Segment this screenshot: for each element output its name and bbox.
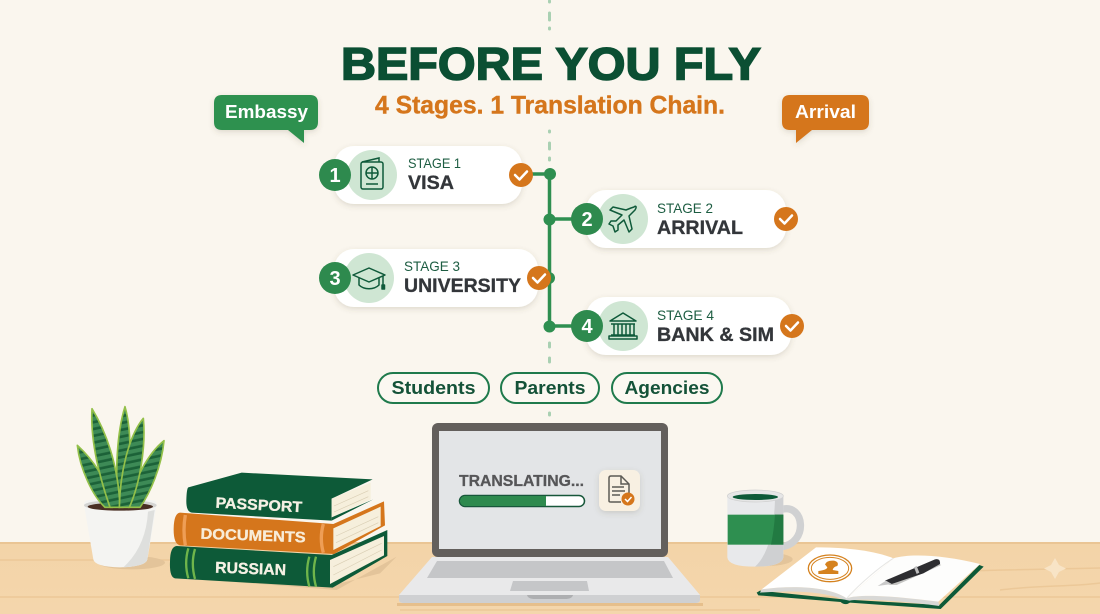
stage 1 card: visa: 1 — [329, 165, 341, 187]
stage 4 card: bank and SIM: BANK & SIM — [657, 325, 774, 346]
stage 4 card: bank and SIM: STAGE 4 — [657, 307, 714, 323]
callout: Arrival: Arrival — [795, 102, 856, 122]
audience pill: Parents: Parents — [514, 378, 586, 398]
book: Passport — [186, 473, 373, 521]
book: Russian: RUSSIAN — [215, 560, 286, 579]
book: Passport: PASSPORT — [215, 495, 303, 516]
dashed centre guide — [548, 1, 551, 415]
icon: bank — [609, 313, 637, 339]
stage 3 card: university: STAGE 3 — [404, 258, 460, 274]
leaves — [77, 407, 164, 507]
audience pill: Parents — [501, 373, 599, 403]
icon: passport — [361, 158, 383, 189]
book: Documents — [174, 501, 385, 554]
stage 3 card: university: 3 — [329, 268, 341, 290]
callout: Embassy — [214, 95, 318, 143]
progress bar — [460, 496, 584, 506]
pot — [84, 500, 157, 567]
timeline connector — [530, 168, 590, 332]
sparkle — [1044, 558, 1066, 579]
stage 2 card: arrival — [571, 190, 798, 248]
stage 4 card: bank and SIM — [571, 297, 804, 355]
stage 1 card: visa — [319, 146, 533, 204]
subtitle: 4 Stages. 1 Translation Chain. — [375, 92, 725, 120]
stage 3 card: university: UNIVERSITY — [404, 276, 521, 297]
book: Documents: DOCUMENTS — [200, 526, 306, 546]
laptop — [397, 423, 703, 606]
icon: document with check — [599, 470, 640, 511]
plant in white pot — [77, 407, 165, 569]
stage 1 card: visa: VISA — [408, 173, 454, 194]
audience pill: Students — [378, 373, 489, 403]
stage 2 card: arrival: STAGE 2 — [657, 200, 713, 216]
stage 3 card: university — [319, 249, 551, 307]
book: Russian — [170, 530, 387, 588]
open notebook with stamp and pen — [757, 547, 984, 609]
audience pill: Agencies — [612, 373, 722, 403]
coffee mug — [727, 490, 800, 567]
stage 4 card: bank and SIM: 4 — [581, 316, 593, 338]
audience pill: Agencies: Agencies — [624, 378, 710, 398]
pen — [878, 559, 941, 586]
audience pill: Students: Students — [392, 378, 476, 398]
stack of books — [167, 473, 397, 590]
title: BEFORE YOU FLY — [341, 38, 761, 90]
callout: Embassy: Embassy — [225, 102, 308, 122]
icon: graduation cap — [353, 268, 385, 289]
translating label: TRANSLATING... — [459, 473, 584, 490]
stamp emblem — [808, 555, 852, 582]
wooden table — [0, 542, 1100, 614]
stage 1 card: visa: STAGE 1 — [408, 155, 461, 171]
stage 2 card: arrival: 2 — [581, 209, 593, 231]
icon: plane — [609, 206, 636, 232]
callout: Arrival — [782, 95, 869, 143]
stage 2 card: arrival: ARRIVAL — [657, 218, 743, 239]
